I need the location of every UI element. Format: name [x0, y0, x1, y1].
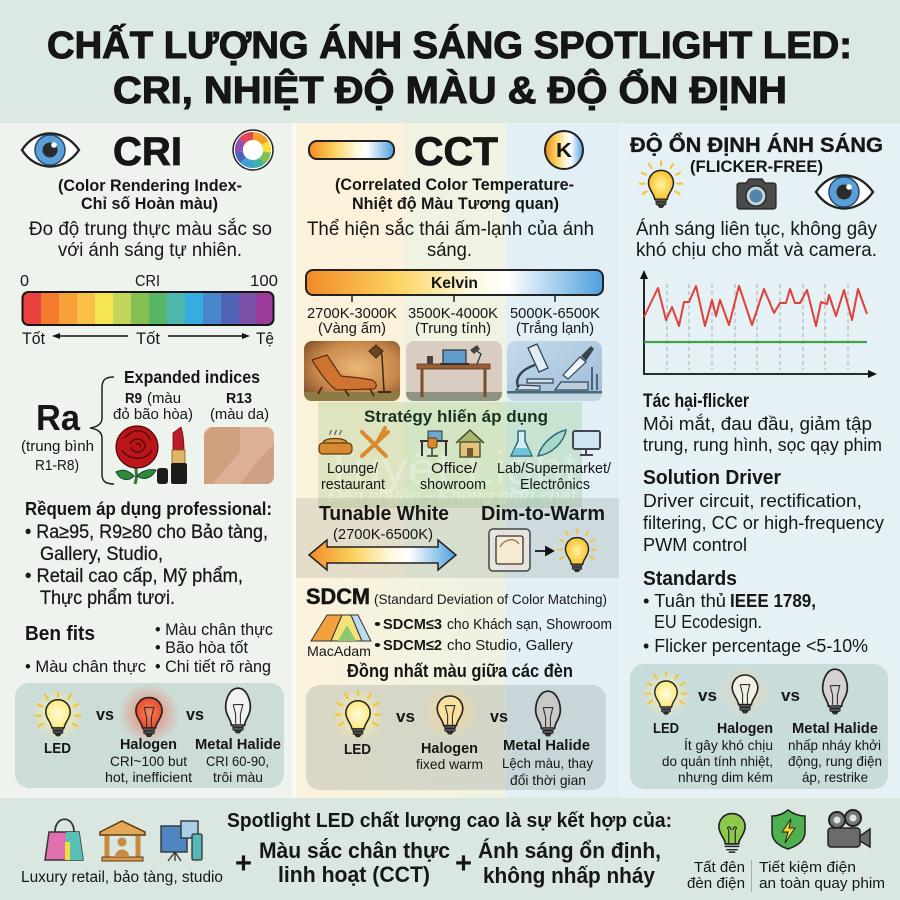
summary heading: Spotlight LED chất lượng cao là sự kết hợp của:	[227, 809, 672, 832]
vs: vs	[96, 705, 114, 724]
icon: leaf pen	[538, 430, 566, 456]
CRI scale bar: 100	[250, 273, 278, 290]
icon: camera	[737, 179, 776, 209]
arrow: to bulb	[535, 547, 553, 555]
summary: color: linh hoạt (CCT)	[278, 862, 430, 887]
footer benefits: Tất đên	[694, 859, 745, 876]
SDCM heading: SDCM	[306, 584, 370, 609]
icon: shield	[772, 810, 805, 849]
solution driver text	[643, 467, 884, 555]
standards text: IEEE 1789,	[730, 591, 816, 611]
standards text: • Tuân thủ	[643, 591, 726, 611]
vs: vs	[698, 686, 717, 705]
scene: warm lounge	[304, 341, 400, 401]
band: tunable white and dim-to-warm: Dim-to-Warm	[481, 503, 605, 525]
summary: stability: không nhấp nháy	[483, 863, 655, 888]
metal halide text	[195, 736, 281, 785]
halogen text: Halogen	[120, 736, 177, 753]
CCT description: Thể hiện sắc thái ấm-lạnh của ánh	[307, 217, 594, 240]
panel: CRI	[0, 123, 296, 798]
icon: film camera	[828, 810, 870, 847]
Kelvin bar: Kelvin	[431, 275, 478, 292]
icon: LED bulb	[642, 671, 690, 719]
swatch: skin tone	[204, 427, 274, 484]
icon: rose	[116, 426, 158, 484]
icon: metal halide bulb	[536, 691, 560, 736]
metal halide text: đổi thời gian	[510, 772, 586, 788]
CCT range labels: (Vàng ấm)	[318, 320, 386, 337]
icon: flask	[511, 431, 532, 456]
band: tunable white and dim-to-warm	[296, 498, 619, 578]
vs: vs	[490, 707, 508, 726]
footer benefits	[687, 859, 885, 892]
flicker description	[636, 217, 877, 261]
metal halide text: trôi màu	[213, 769, 263, 785]
metal halide text: Metal Halide	[792, 720, 878, 737]
halogen text	[416, 740, 483, 772]
title: CRI, NHIỆT ĐỘ MÀU & ĐỘ ỔN ĐỊNH	[113, 67, 787, 112]
footer band	[0, 798, 900, 900]
solution driver text: filtering, CC or high-frequency	[643, 513, 884, 533]
vs: vs	[186, 705, 204, 724]
summary: stability: Ánh sáng ổn định,	[478, 838, 661, 863]
SDCM list: •	[374, 616, 381, 633]
watermark: Đèn chuẩn - Không gian chất	[328, 486, 577, 505]
flicker harm text: Mỏi mắt, đau đầu, giảm tập	[643, 413, 872, 434]
icon: sofa	[319, 430, 352, 454]
arrow: double gradient	[309, 540, 456, 570]
expanded indices heading: Expanded indices	[124, 367, 260, 387]
metal halide text	[502, 737, 593, 788]
standards text: • Flicker percentage <5-10%	[643, 636, 868, 656]
flicker harm text: Tác hại-flicker	[643, 391, 749, 412]
benefits: • Màu chân thực	[25, 657, 146, 676]
SDCM list: cho Studio, Gallery	[447, 637, 573, 654]
application labels: Lab/Supermarket/	[497, 460, 612, 477]
band: tunable white and dim-to-warm: Tunable White	[319, 503, 449, 525]
R9 label: đỏ bão hòa)	[113, 406, 193, 423]
halogen text: Halogen	[421, 740, 478, 757]
vs: vs	[781, 686, 800, 705]
CCT range labels: 3500K-4000K	[408, 305, 498, 322]
SDCM list	[374, 616, 612, 654]
icon: studio light	[161, 821, 202, 861]
LED label: LED	[344, 741, 371, 758]
LED label: LED	[44, 740, 71, 757]
SDCM heading	[306, 584, 607, 609]
requirements list	[25, 499, 272, 609]
benefits: • Màu chân thực	[155, 620, 273, 639]
icon: monitor	[573, 431, 600, 455]
SDCM heading: (Standard Deviation of Color Matching)	[374, 591, 607, 607]
flicker harm text	[643, 391, 882, 455]
icon: kelvin badge: K	[556, 140, 573, 162]
metal halide text: Lệch màu, thay	[502, 755, 593, 771]
R13 label: R13	[226, 390, 252, 407]
application labels: Office/	[431, 460, 478, 477]
CRI heading: CRI	[113, 130, 182, 174]
Ra label: Ra	[36, 397, 81, 438]
solution driver text: PWM control	[643, 535, 747, 555]
metal halide text: áp, restrike	[802, 769, 868, 785]
flicker heading: ĐỘ ỔN ĐỊNH ÁNH SÁNG	[630, 133, 883, 157]
halogen text: Ít gây khó chịu	[684, 737, 773, 753]
icon: kelvin badge	[545, 131, 583, 169]
R9 label: R9	[125, 390, 142, 407]
icon: halogen bulb	[119, 684, 179, 744]
standards text	[643, 568, 868, 656]
benefits: • Chi tiết rõ ràng	[155, 657, 271, 676]
requirements list: Rềquem áp dụng professional:	[25, 499, 272, 519]
title	[47, 23, 852, 112]
CCT description: sáng.	[427, 239, 472, 261]
CCT description	[307, 217, 594, 261]
icon: gradient pill	[309, 141, 394, 159]
icon: office chair and desk	[420, 431, 448, 456]
R13 label: (màu da)	[210, 406, 269, 423]
icon: cutlery	[362, 428, 388, 456]
header band	[0, 0, 900, 123]
watermark	[318, 402, 582, 508]
icon: LED bulb	[32, 689, 84, 741]
requirements list: • Ra≥95, R9≥80 cho Bảo tàng,	[25, 522, 268, 543]
watermark: Tuyết Light	[323, 442, 578, 494]
requirements list: Gallery, Studio,	[40, 544, 163, 565]
CRI subtitle: Chỉ số Hoàn màu)	[81, 194, 218, 213]
metal halide text	[788, 720, 882, 785]
halogen text: do quán tính nhiệt,	[662, 753, 773, 769]
SDCM list: cho Khách sạn, Showroom	[447, 616, 612, 633]
flicker description: khó chịu cho mắt và camera.	[636, 238, 877, 261]
metal halide text: Metal Halide	[195, 736, 281, 753]
metal halide text: động, rung điện	[788, 753, 882, 769]
summary: color	[259, 838, 450, 887]
CRI scale bar	[20, 273, 278, 348]
panel: CCT	[296, 123, 619, 798]
icon: MacAdam	[307, 615, 371, 659]
SDCM list: •	[374, 637, 381, 654]
comparison panel: CCT	[306, 684, 606, 790]
Ra label	[21, 397, 94, 474]
comparison panel: CRI	[15, 683, 284, 788]
footer benefits: đèn điện	[687, 875, 745, 892]
metal halide text: nhấp nháy khởi	[788, 737, 881, 753]
requirements list: • Retail cao cấp, Mỹ phẩm,	[25, 566, 243, 587]
icon: metal halide bulb	[823, 669, 847, 714]
standards text: Standards	[643, 568, 737, 590]
CRI scale bar: Tệ	[256, 329, 274, 348]
icon: lipstick	[157, 427, 187, 484]
icon: house	[456, 430, 484, 457]
halogen text	[662, 720, 773, 785]
summary: color: Màu sắc chân thực	[259, 838, 450, 863]
Ra label: (trung bình	[21, 438, 94, 455]
audience caption: Luxury retail, bảo tàng, studio	[21, 869, 223, 886]
halogen text	[105, 736, 192, 785]
vs: vs	[396, 707, 415, 726]
Ra label: R1-R8)	[35, 457, 79, 474]
uniformity heading: Đồng nhất màu giữa các đèn	[347, 661, 573, 681]
CCT subtitle: Nhiệt độ Màu Tương quan)	[352, 194, 559, 213]
benefits: • Bão hòa tốt	[155, 638, 248, 657]
CRI scale bar: CRI	[135, 273, 160, 290]
R9 label: (màu	[147, 390, 181, 407]
application labels: Lounge/	[327, 460, 379, 477]
metal halide text: Metal Halide	[503, 737, 590, 754]
halogen text: nhưng dim kém	[678, 769, 773, 785]
CCT subtitle: (Correlated Color Temperature-	[335, 175, 574, 194]
SDCM list: SDCM≤2	[383, 637, 442, 654]
metal halide text: CRI 60-90,	[206, 753, 269, 769]
icon: bulb	[640, 161, 682, 207]
application labels: Electrônics	[520, 476, 590, 493]
CRI scale bar: Tốt	[22, 329, 45, 348]
scene: office desk	[406, 341, 502, 401]
standards text: EU Ecodesign.	[654, 612, 762, 632]
summary: stability	[478, 838, 661, 888]
flicker harm text: trung, rung hình, sọc qạy phim	[643, 435, 882, 455]
line chart: flicker waveform	[640, 270, 877, 378]
footer benefits: Tiết kiệm điện	[759, 859, 856, 876]
icon: dimmer switch	[489, 529, 530, 571]
icon: shopping bag	[45, 819, 83, 860]
CCT range labels: (Trắng lạnh)	[516, 320, 594, 337]
CCT range labels: (Trung tính)	[415, 320, 491, 337]
CRI scale bar: 0	[20, 273, 29, 290]
title: CHẤT LƯỢNG ÁNH SÁNG SPOTLIGHT LED:	[47, 23, 852, 67]
benefits: Ben fits	[25, 623, 95, 645]
strategy heading: Stratégy hliến áp dụng	[364, 407, 548, 426]
icon: warm bulb	[558, 529, 596, 572]
icon: halogen bulb	[422, 684, 478, 740]
flicker heading: (FLICKER-FREE)	[690, 157, 823, 176]
halogen text: fixed warm	[416, 756, 483, 772]
CRI description: Đo độ trung thực màu sắc so	[29, 217, 272, 240]
solution driver text: Driver circuit, rectification,	[643, 491, 862, 511]
requirements list: Thực phẩm tươi.	[40, 588, 175, 609]
icon: halogen bulb	[719, 665, 771, 717]
CCT range labels	[307, 305, 600, 337]
halogen text: Halogen	[717, 720, 773, 737]
benefits	[25, 620, 273, 676]
halogen text: CRI~100 but	[110, 753, 187, 769]
CRI scale bar: Tốt	[136, 329, 160, 348]
icon: eye	[22, 134, 79, 166]
application labels: restaurant	[321, 476, 386, 493]
CRI subtitle: (Color Rendering Index-	[58, 176, 242, 195]
flicker heading	[630, 133, 883, 176]
comparison panel: flicker	[630, 664, 888, 789]
icon: green bulb	[719, 814, 745, 852]
CCT heading: CCT	[414, 130, 498, 174]
Kelvin bar	[306, 270, 603, 302]
halogen text: hot, inefficient	[105, 769, 192, 785]
band: tunable white and dim-to-warm: (2700K-6500K)	[333, 526, 433, 543]
icon: metal halide bulb	[226, 688, 250, 733]
CCT subtitle	[335, 175, 574, 213]
scene: lab	[507, 341, 602, 401]
plus: +	[235, 847, 252, 880]
icon: LED bulb	[332, 690, 384, 742]
CRI description	[29, 217, 272, 261]
icon: museum	[100, 821, 145, 861]
flicker description: Ánh sáng liên tục, không gây	[636, 217, 877, 240]
solution driver text: Solution Driver	[643, 467, 781, 489]
SDCM list: SDCM≤3	[383, 616, 442, 633]
application labels	[321, 460, 612, 493]
CCT range labels: 2700K-3000K	[307, 305, 397, 322]
application labels: showroom	[420, 476, 486, 493]
CCT range labels: 5000K-6500K	[510, 305, 600, 322]
plus: +	[455, 847, 472, 880]
LED label: LED	[653, 720, 679, 737]
footer benefits: an toàn quay phim	[759, 875, 885, 892]
R13 label	[210, 390, 269, 423]
CRI subtitle	[58, 176, 242, 213]
icon: eye	[816, 176, 873, 208]
CRI description: với ánh sáng tự nhiên.	[58, 239, 242, 261]
icon: MacAdam: MacAdam	[307, 643, 371, 659]
bracket	[90, 377, 114, 484]
icon: color wheel	[233, 130, 273, 170]
R9 label	[113, 390, 193, 423]
panel: flicker stability	[619, 123, 900, 798]
